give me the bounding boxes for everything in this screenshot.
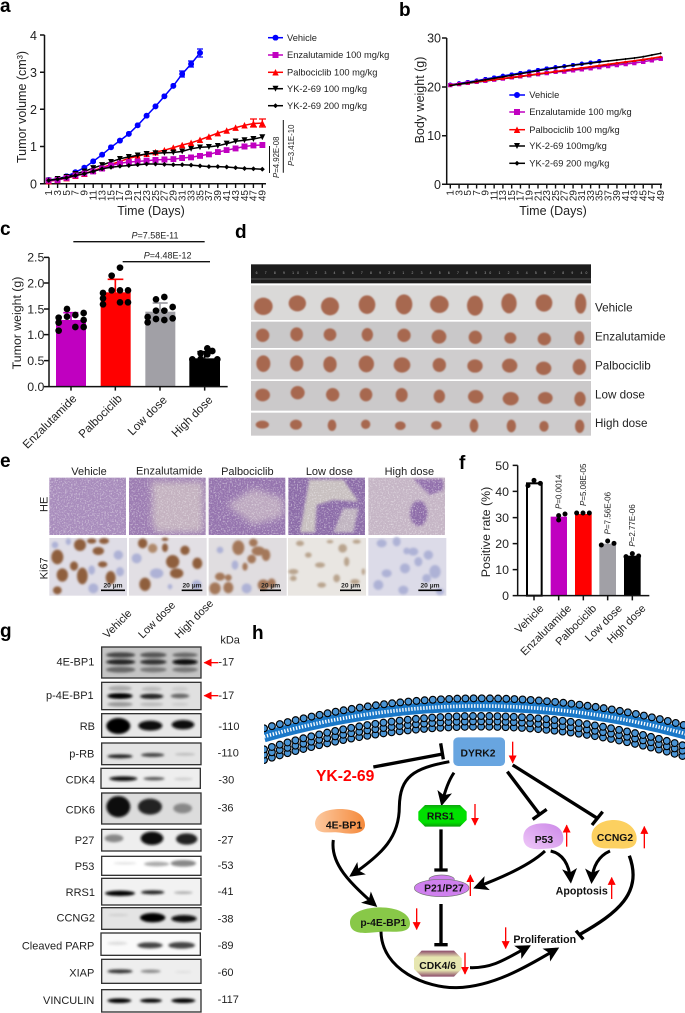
panel f: positive rate bar chart (479, 459, 649, 658)
YK-2-69 label: YK-2-69 (316, 768, 375, 785)
y tick labels: 0.5 (27, 354, 44, 368)
bars (527, 483, 641, 596)
y tick labels: 1.0 (27, 328, 44, 342)
molecular weights: -110 (218, 721, 240, 733)
group labels: Enzalutamide (595, 331, 666, 344)
y tick labels: 3 (30, 66, 37, 80)
series: YK-2-69 200 mg/kg (49, 164, 262, 180)
CCNG2 node: CCNG2 (597, 833, 633, 844)
legend b: YK-2-69 200 mg/kg (529, 158, 609, 168)
legend a: Enzalutamide 100 mg/kg (287, 50, 389, 60)
x tick labels: 23 (142, 190, 153, 201)
group labels: Low dose (595, 388, 645, 401)
y tick labels: 30 (427, 32, 441, 46)
y axis label: Positive rate (%) (479, 487, 493, 577)
x tick labels: 43 (630, 190, 641, 201)
lane headers: High dose (173, 598, 216, 641)
x category labels (513, 603, 648, 658)
cell membrane (264, 698, 685, 760)
molecular weights: -17 (218, 657, 234, 669)
P values (555, 463, 637, 547)
inhibition: P21/P27 to CDK4/6 (434, 904, 448, 945)
DYRK2 node (453, 737, 505, 766)
group labels (595, 301, 666, 430)
significance brackets: P=7.58E-11 (131, 231, 179, 241)
x tick labels: 13 (97, 190, 108, 201)
Proliferation label: Proliferation (513, 934, 576, 946)
RRS1 node: RRS1 (427, 811, 455, 822)
axes (442, 38, 662, 184)
statistics brackets and P values (270, 120, 296, 178)
x tick labels: 17 (115, 190, 126, 201)
legend b: Vehicle (529, 90, 559, 100)
x tick labels: 25 (551, 190, 562, 201)
panel b: body weight line chart (413, 32, 667, 218)
x category labels: Vehicle (513, 603, 546, 636)
x tick labels: 23 (542, 190, 553, 201)
arrow: CCNG2 to apoptosis (592, 851, 610, 881)
photo strips (251, 285, 591, 436)
y tick labels (495, 459, 509, 603)
x tick labels: 5 (463, 190, 474, 196)
protein labels: RRS1 (66, 887, 95, 899)
red arrow: P53 up (565, 825, 569, 847)
group labels: Vehicle (595, 301, 633, 314)
arrow: 4E-BP1 to p-4E-BP1 (333, 840, 375, 905)
molecular weights: -60 (218, 967, 234, 979)
blot bands (105, 652, 198, 1003)
P values: P=2.77E-06 (628, 504, 637, 547)
x tick labels: 25 (151, 190, 162, 201)
molecular weights: -38 (218, 913, 234, 925)
x tick labels: 49 (656, 190, 667, 201)
x tick labels: 7 (472, 190, 483, 196)
molecular weights: -110 (218, 748, 239, 760)
molecular weights: -53 (218, 860, 234, 872)
y tick labels: 20 (427, 80, 441, 94)
ruler: 6 7 8 9 10 1 2 3 4 5 6 7 8 9 20 1 2 3 4 5 6 7 8 9 30 1 2 3 4 5 6 7 8 9 40 (256, 271, 587, 275)
protein labels: Cleaved PARP (22, 940, 94, 952)
series: YK-2-69 100 mg/kg (450, 57, 661, 85)
y tick labels: 10 (495, 563, 509, 577)
red arrow: CDK4/6 down (463, 953, 467, 974)
y tick labels: 0 (502, 589, 509, 603)
panel e: histology micrographs (38, 465, 446, 596)
x category labels: Enzalutamide (519, 603, 574, 658)
x axis label: Time (Days) (519, 204, 587, 218)
column headers: Enzalutamide (136, 465, 203, 477)
lane headers: Low dose (136, 599, 178, 641)
y tick labels: 2.5 (27, 251, 44, 265)
DYRK2 node: DYRK2 (460, 749, 496, 760)
protein labels: RB (80, 721, 95, 733)
P21/P27 node (414, 875, 469, 897)
column headers: High dose (385, 466, 434, 478)
blot backgrounds (101, 647, 201, 1012)
significance brackets: P=4.48E-12 (144, 251, 192, 261)
P21/P27 node: P21/P27 (424, 883, 464, 894)
y tick labels (27, 251, 44, 394)
legend b: Enzalutamide 100 mg/kg (529, 107, 632, 117)
x tick labels: 17 (516, 190, 527, 201)
lane headers: Vehicle (101, 608, 135, 641)
legend a: YK-2-69 200 mg/kg (287, 101, 367, 111)
legend a: Vehicle (287, 33, 317, 43)
CDK4/6 node (414, 951, 462, 977)
error bars (63, 279, 212, 358)
protein labels: VINCULIN (43, 995, 94, 1007)
panel a: tumor volume line chart (15, 29, 389, 218)
4E-BP1 node: 4E-BP1 (326, 821, 362, 832)
protein labels: CDK6 (66, 804, 95, 816)
4E-BP1 node (315, 809, 365, 834)
red arrow: RRS1 down (473, 804, 477, 825)
legend b: Palbociclib 100 mg/kg (529, 125, 620, 135)
x tick labels: 39 (612, 190, 623, 201)
molecular weights: -30 (218, 774, 234, 786)
x tick labels: 15 (507, 190, 518, 201)
x tick labels: 49 (258, 190, 269, 201)
x tick labels: 39 (213, 190, 224, 201)
panel label g: g (0, 621, 12, 642)
y tick labels (30, 29, 37, 192)
P values: P=5.08E-05 (579, 463, 588, 506)
protein labels: p-4E-BP1 (46, 690, 94, 702)
series: palbociclib (49, 123, 262, 181)
y axis label: Tumor volume (cm³) (15, 51, 29, 163)
x tick labels: 27 (160, 190, 171, 201)
x tick labels: 7 (71, 190, 82, 196)
error bars (179, 49, 203, 77)
lane headers (101, 598, 216, 641)
x category labels: Low dose (125, 394, 170, 438)
HE panels (49, 478, 445, 535)
protein labels: P53 (75, 861, 94, 873)
axes (44, 257, 228, 391)
panel label h: h (252, 623, 264, 644)
y tick labels: 40 (495, 485, 509, 499)
x tick labels: 19 (124, 190, 135, 201)
y tick labels: 20 (495, 537, 509, 551)
arrow: p-4E-BP1 to proliferation (381, 932, 557, 988)
x tick labels: 33 (186, 190, 197, 201)
x tick labels: 47 (249, 190, 260, 201)
y tick labels: 0 (30, 178, 37, 192)
x tick labels: 35 (595, 190, 606, 201)
row labels: Ki67 (38, 557, 50, 579)
red arrow: p-4E-BP1 down (415, 908, 419, 929)
red arrow: proliferation down (504, 927, 508, 948)
y tick labels: 30 (495, 511, 509, 525)
protein labels: 4E-BP1 (56, 657, 94, 669)
y tick labels (427, 32, 441, 192)
protein labels: P27 (75, 835, 94, 847)
statistics brackets and P values: P=4.92E-08 (272, 137, 281, 178)
P values: P=0.0014 (555, 474, 564, 509)
x tick labels: 11 (489, 190, 500, 200)
CDK4/6 node: CDK4/6 (419, 961, 456, 972)
Ki67 panels (49, 537, 446, 596)
inhibition: RRS1 to P21/P27 (434, 829, 448, 870)
column headers: Low dose (306, 466, 353, 478)
molecular weights (218, 657, 240, 1006)
x tick labels: 9 (481, 190, 492, 196)
P values: P=7.56E-06 (603, 491, 612, 534)
protein labels: CCNG2 (57, 913, 95, 925)
y tick labels: 10 (427, 129, 441, 143)
x tick labels: 3 (454, 190, 465, 196)
scale bars: 20 µm (341, 583, 360, 590)
group labels: Palbociclib (595, 359, 651, 372)
column headers: Palbociclib (221, 466, 274, 478)
x tick labels: 11 (88, 190, 100, 200)
panel label b: b (399, 0, 411, 21)
y tick labels: 0.0 (27, 380, 44, 394)
statistics brackets and P values: P=3.41E-10 (287, 124, 296, 166)
x tick labels: 35 (195, 190, 206, 201)
molecular weights: -36 (218, 803, 234, 815)
molecular weights: -89 (218, 940, 234, 952)
inhibition: YK-2-69 to DYRK2 (373, 743, 443, 767)
x category labels: Palbociclib (76, 392, 125, 441)
RRS1 node (418, 805, 467, 827)
panel h: signalling pathway diagram (264, 698, 685, 988)
molecular weights: -117 (218, 994, 239, 1006)
x tick labels: 37 (204, 190, 215, 201)
tumors (254, 293, 586, 433)
series: YK-2-69 100 mg/kg (49, 137, 262, 180)
legend a (268, 33, 389, 111)
x tick labels: 9 (80, 190, 91, 196)
x category labels: High dose (169, 394, 215, 440)
x tick labels: 15 (106, 190, 117, 201)
x tick labels: 21 (533, 190, 544, 201)
x tick labels: 41 (222, 190, 233, 201)
x tick labels: 27 (560, 190, 571, 201)
column headers (71, 465, 434, 478)
data points (55, 264, 221, 363)
protein labels: CDK4 (66, 774, 95, 786)
significance brackets (73, 231, 210, 262)
error bars (250, 119, 266, 127)
x tick labels: 31 (178, 190, 188, 201)
bars (56, 292, 220, 387)
red arrow: DYRK2 down (511, 742, 515, 763)
row labels (38, 497, 50, 579)
protein labels (22, 657, 95, 1007)
x category labels: Palbociclib (554, 603, 599, 648)
panel d: tumor photographs (251, 264, 666, 436)
x tick labels: 45 (240, 190, 251, 201)
legend b: YK-2-69 100mg/kg (529, 141, 607, 151)
x category labels (20, 392, 215, 451)
arrow: DYRK2 to p-4E-BP1 (352, 762, 449, 875)
series: palbociclib (450, 57, 661, 85)
panel g: western blots (22, 598, 241, 1012)
y axis label: Body weight (g) (413, 57, 427, 143)
x tick labels: 1 (44, 190, 55, 196)
protein labels: XIAP (69, 968, 94, 980)
molecular weights: -27 (218, 835, 234, 847)
series: enzalutamide (49, 145, 262, 181)
p-4E-BP1 node: p-4E-BP1 (360, 918, 407, 929)
panel label f: f (459, 453, 466, 474)
y tick labels: 0 (434, 178, 441, 192)
x tick labels: 41 (621, 190, 632, 201)
column headers: Vehicle (71, 466, 107, 478)
x tick labels: 43 (231, 190, 242, 201)
x tick labels: 1 (446, 190, 457, 196)
protein labels: p-RB (69, 748, 94, 760)
axes (40, 35, 266, 184)
y tick labels: 4 (30, 29, 37, 43)
molecular weights: -17 (218, 690, 234, 702)
p-4E-BP1 node (350, 907, 410, 933)
red arrow: CCNG2 up (642, 827, 646, 848)
P53 node (523, 823, 563, 849)
red arrow: apoptosis up (610, 878, 614, 899)
y tick labels: 1.5 (27, 302, 44, 316)
red arrow: P21/P27 up (468, 875, 472, 896)
scale bars (101, 583, 442, 590)
x tick labels: 31 (577, 190, 588, 201)
red band arrows (204, 663, 218, 696)
row labels: HE (38, 497, 50, 512)
y axis label: Tumor weight (g) (10, 277, 24, 369)
legend a: YK-2-69 100 mg/kg (287, 84, 367, 94)
series: vehicle (450, 61, 599, 85)
x axis label: Time (Days) (117, 204, 185, 218)
Apoptosis label: Apoptosis (556, 885, 608, 897)
data points (525, 478, 641, 559)
arrow: CDK4/6 to proliferation (470, 947, 528, 968)
panel label d: d (235, 222, 247, 243)
x category labels: Enzalutamide (20, 392, 79, 451)
ruler (251, 264, 591, 283)
group labels: High dose (595, 417, 647, 430)
x tick labels: 45 (638, 190, 650, 201)
series: enzalutamide (450, 59, 661, 85)
CCNG2 node (592, 820, 637, 849)
x category labels: Low dose (583, 603, 625, 644)
kDa header: kDa (220, 634, 241, 646)
inhibition: CCNG2 to proliferation (576, 856, 633, 939)
y tick labels: 50 (495, 459, 509, 473)
x tick labels: 19 (524, 190, 536, 201)
x tick labels (44, 190, 269, 201)
arrow: DYRK2 to RRS1 (442, 773, 454, 803)
x tick labels: 21 (133, 190, 144, 201)
arrow: P53 to apoptosis (551, 851, 571, 881)
x tick labels: 5 (62, 190, 73, 196)
x tick labels: 37 (603, 190, 614, 201)
y tick labels: 2 (30, 103, 37, 117)
x tick labels: 3 (53, 190, 64, 196)
x category labels: High dose (605, 603, 648, 646)
P53 node: P53 (535, 835, 553, 846)
x tick labels: 47 (647, 190, 658, 201)
panel c: tumor weight bar chart (10, 231, 228, 451)
legend b (509, 90, 632, 168)
arrow: P53 to P21/P27 (476, 851, 545, 887)
scale bars: 20 µm (261, 583, 280, 590)
series: YK-2-69 200 mg/kg (450, 53, 661, 86)
series: vehicle (49, 53, 200, 180)
x tick labels: 33 (586, 190, 597, 201)
panel label e: e (0, 451, 11, 472)
x tick labels: 13 (498, 190, 509, 201)
panel label c: c (0, 219, 11, 240)
molecular weights: -41 (218, 886, 234, 898)
scale bars: 20 µm (182, 583, 202, 590)
x tick labels: 29 (568, 190, 579, 201)
inhibition: DYRK2 to CCNG2 (513, 765, 603, 825)
inhibition: DYRK2 to P53 (507, 772, 547, 819)
legend a: Palbociclib 100 mg/kg (287, 67, 377, 77)
x tick labels (446, 190, 667, 201)
scale bars: 20 µm (103, 583, 123, 590)
axes (513, 465, 649, 600)
y tick labels: 1 (30, 140, 37, 154)
y tick labels: 2.0 (27, 276, 44, 290)
x tick labels: 29 (169, 190, 180, 201)
scale bars: 20 µm (420, 583, 440, 590)
